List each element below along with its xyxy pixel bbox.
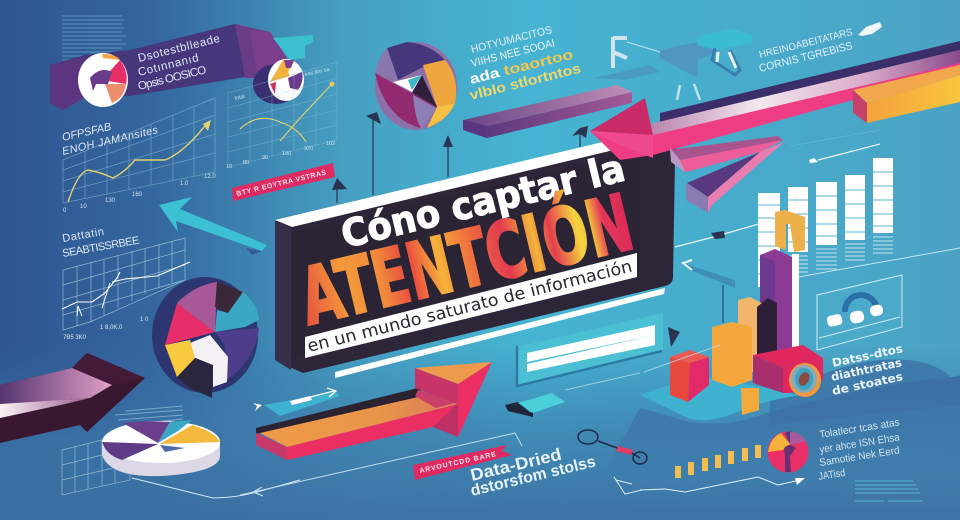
text: right data label: Datss-dtos <box>831 341 904 370</box>
text: chart axis labels: 0 <box>63 208 67 214</box>
chart: white bar columns <box>675 130 960 287</box>
text: top right copy: CORNIS TGREBISS <box>758 40 854 75</box>
text: top centre copy <box>468 24 583 103</box>
text: banner copy: Cotınnanıd <box>137 52 200 79</box>
chart: white line chart <box>62 238 190 341</box>
icon: cyan shape <box>273 35 313 60</box>
panel: dark blue hill and platform <box>600 359 960 480</box>
text: bottom right paragraph: JATisd <box>818 467 846 483</box>
squiggle arrow bottom right <box>640 477 805 492</box>
text: small curve labels: 90 <box>262 155 268 161</box>
text: chart labels <box>63 317 149 341</box>
text: chart axis labels: 160 <box>132 192 143 198</box>
text: right data label: de stoates <box>831 369 904 398</box>
icon: right round pie <box>253 59 304 104</box>
purple tall bar <box>760 249 792 350</box>
text: data-dried: dstorsfom stolss <box>469 453 597 500</box>
text: data-dried: Data-Dried <box>468 445 563 485</box>
orange mid bar <box>738 297 765 372</box>
icon: glasses <box>578 430 647 464</box>
text: top right copy <box>758 22 882 75</box>
text: small curve labels: eas ton sa <box>304 67 331 78</box>
pie chart: flat pie with grid <box>62 406 220 495</box>
chart: crossing curves <box>226 62 337 170</box>
pink tag bottom <box>413 445 512 480</box>
arrow: bent pink ribbon <box>670 136 784 213</box>
arrow stems and flags <box>332 112 588 203</box>
arrow: orange pink large arrow <box>256 362 492 460</box>
text: top centre copy: ada toaortoo <box>468 46 575 87</box>
text: chart axis labels: 1.0 <box>180 181 189 187</box>
text: top right copy: HREINOABEITATARS <box>758 27 854 61</box>
text: chart labels: 1 8.0K.0 <box>100 325 123 331</box>
pie chart: top centre pie <box>375 42 457 130</box>
text: left data heading: Dattatin <box>61 226 105 245</box>
text: small curve labels: total <box>234 94 246 102</box>
arrow: long pink band with orange block <box>590 41 960 160</box>
icon: small check arrow <box>614 477 642 494</box>
text: chart labels: 7B5 3K0 <box>63 335 87 341</box>
bar chart: 3D blocks <box>670 210 823 415</box>
text: chart heading: ENOH JAMAnsites <box>61 124 160 158</box>
connector line bottom <box>240 345 720 496</box>
text: chart axis labels: 10 <box>80 204 87 210</box>
pie chart: bottom right small pie <box>768 432 808 472</box>
text: chart labels: 1 0 <box>140 317 149 323</box>
text: small curve labels: 80 <box>243 160 249 166</box>
red cube <box>670 350 709 402</box>
pink tag <box>232 163 335 201</box>
billboard: main title panel <box>275 137 677 378</box>
subtitle band: en un mundo saturato de información <box>305 257 634 357</box>
arrow: big dark arrow <box>0 353 145 443</box>
text: small curve labels: 920 <box>304 146 313 152</box>
text: bottom right paragraph: Tolatlecr tcas atas <box>819 416 900 441</box>
purple bar left face <box>760 255 775 340</box>
text: right data label <box>830 341 904 398</box>
text: small curve labels: 10 <box>226 164 232 170</box>
text: top centre copy: VIIHS NEE SOOAI <box>470 37 556 70</box>
text: small curve labels: 102 <box>326 141 335 147</box>
arrow: small white arrows <box>253 388 340 416</box>
panel: white bars card <box>517 313 663 386</box>
text: banner copy: Dsotestblleade <box>137 33 221 65</box>
pink tag bottom: ARVOUTCDD BARE <box>419 451 497 475</box>
arrow: small blue signpost <box>683 260 735 323</box>
orange hook <box>775 210 805 252</box>
dark bar <box>757 298 777 362</box>
text: right data label: diathtratas <box>830 355 903 384</box>
icon: ring <box>789 363 821 397</box>
white pillar <box>792 254 799 354</box>
chart: line chart left <box>61 98 216 214</box>
text: top centre copy: vlbIo stlortntos <box>468 60 583 103</box>
arrow: cyan left-pointing arrow <box>159 197 267 255</box>
text: chart axis labels <box>63 174 216 214</box>
connector line with arrow <box>132 478 300 498</box>
pink box <box>753 345 823 393</box>
pink tag: BTY R EOYTRA VSTRAS <box>236 170 327 198</box>
pie chart: large 3D pie <box>152 277 259 398</box>
text: left data heading: SEABTISSRBEE <box>61 235 140 260</box>
icons: table shapes top right <box>594 28 752 100</box>
device: usb block <box>505 393 565 417</box>
text: banner copy <box>137 33 221 93</box>
yellow progress ticks <box>675 445 761 478</box>
text: top centre copy: HOTYUMACITOS <box>470 24 553 56</box>
banner: purple ribbon with pies <box>50 24 313 110</box>
text: chart heading: OFPSFAB <box>61 121 112 144</box>
text: title line 2: ATENTCIÓN <box>291 176 641 343</box>
decorative lines bottom right <box>855 481 923 501</box>
decorative line block top left <box>62 16 126 60</box>
arrow small flag by card <box>668 327 680 347</box>
text: banner copy: Opsis OOSICO <box>137 64 208 93</box>
panel: dial widget <box>817 275 902 350</box>
text: chart axis labels: 130 <box>105 198 116 204</box>
icon: left donut pie <box>78 53 128 107</box>
small orange block <box>741 388 759 415</box>
text: bottom right paragraph: yer ahce ISN Ehsa <box>819 431 901 456</box>
text: bottom right paragraph: Samotie Nek Eerd <box>819 444 901 469</box>
text: small curve labels: 180 <box>282 151 291 157</box>
text: chart axis labels: 12.0 <box>204 174 216 180</box>
bar: long mauve 3D bar <box>463 85 632 138</box>
text: small curve labels <box>226 67 335 170</box>
text: bottom right paragraph <box>818 416 901 483</box>
text: title line 1: Cóno captar la <box>337 146 629 257</box>
large orange bar <box>712 322 752 387</box>
